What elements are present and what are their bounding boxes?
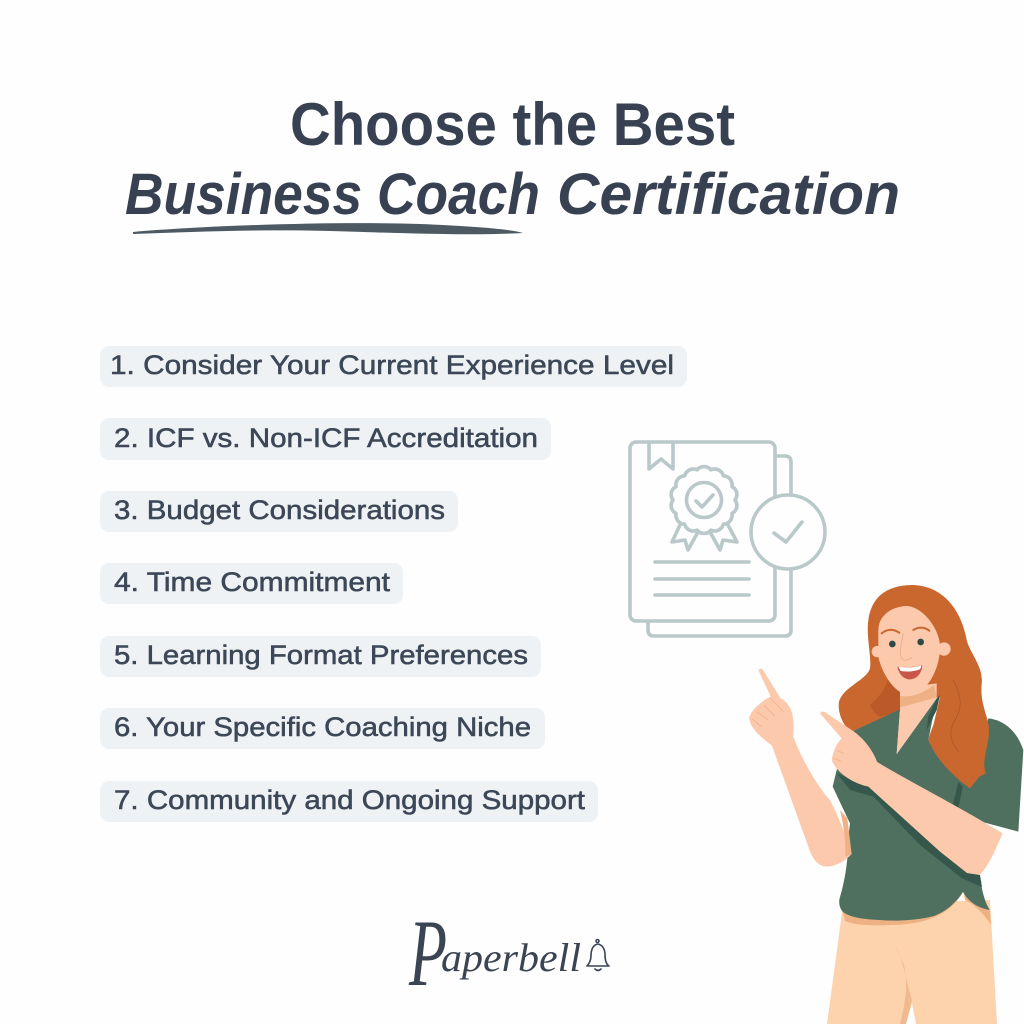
illustration: woman pointing [749, 585, 1023, 1024]
nose [900, 633, 912, 660]
arm shadow on shirt [837, 773, 982, 887]
item 3 [100, 491, 458, 532]
item 3: 3. Budget Considerations [114, 495, 445, 525]
item 2: 2. ICF vs. Non-ICF Accreditation [114, 423, 538, 453]
shirt placket shadow [927, 695, 963, 817]
logo: Paperbell wordmark: aperbell [441, 935, 581, 980]
item 6: 6. Your Specific Coaching Niche [114, 712, 531, 742]
trousers [827, 892, 997, 1024]
item 2 [100, 418, 551, 460]
item 1: 1. Consider Your Current Experience Level [110, 350, 674, 380]
icon: bell [587, 940, 609, 970]
hair shadow [870, 670, 903, 717]
item 5 [100, 636, 541, 677]
title underline brush stroke [133, 223, 523, 234]
icon: certificate document with seal and check badge [630, 442, 825, 636]
title: Choose the Best [290, 91, 735, 158]
list of seven considerations [100, 346, 687, 822]
item 7: 7. Community and Ongoing Support [114, 785, 586, 815]
item 1 [100, 346, 687, 387]
pointing hand [820, 712, 878, 787]
logo: Paperbell wordmark: P [408, 900, 447, 1007]
title: Business Coach [125, 162, 540, 227]
hair back [839, 585, 989, 788]
item 6 [100, 708, 545, 749]
raised hand [749, 669, 794, 747]
face [878, 606, 940, 695]
hair front lock [928, 627, 989, 788]
eyebrows [882, 628, 929, 633]
logo: Paperbell wordmark [408, 900, 581, 1007]
item 4 [100, 563, 403, 604]
raised arm with elbow [772, 737, 852, 867]
pointing forearm [868, 762, 1003, 875]
mouth [897, 665, 922, 679]
shirt [833, 698, 1023, 921]
item 4: 4. Time Commitment [114, 567, 391, 597]
ears [872, 646, 883, 657]
eyes [889, 641, 896, 647]
neck [897, 683, 937, 754]
item 5: 5. Learning Format Preferences [114, 640, 528, 670]
title [125, 91, 900, 227]
upper body [749, 585, 1023, 921]
title: Certification [557, 162, 900, 227]
item 7 [100, 781, 598, 822]
